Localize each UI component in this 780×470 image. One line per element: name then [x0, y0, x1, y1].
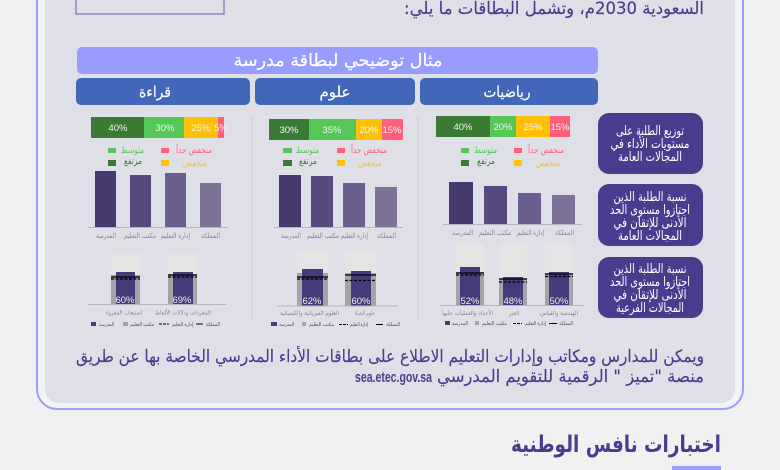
math chart legend: المدرسة	[452, 321, 468, 327]
reading legend: مرتفع	[124, 157, 142, 167]
reading sub-domain chart	[88, 253, 226, 316]
row label: sub domains: المجالات الفرعية	[616, 301, 684, 316]
title bar: مثال توضيحي لبطاقة مدرسة	[234, 51, 442, 71]
math stacked bar: 25%	[523, 122, 543, 133]
science legend	[283, 143, 387, 169]
reading stacked bar: 5%	[214, 123, 228, 134]
math sub-domain chart: 48%	[503, 296, 523, 307]
reading legend: متوسط	[121, 146, 144, 156]
science sub-domain chart: 60%	[351, 296, 371, 307]
math chart legend	[445, 321, 573, 327]
header: reading	[76, 78, 250, 105]
science sub-domain chart	[277, 251, 398, 317]
math sub-domain chart: الهندسة والقياس	[540, 310, 578, 317]
reading bar chart: المدرسة	[96, 232, 116, 240]
reading bar chart: إدارة التعليم	[161, 232, 190, 240]
reading sub-domain chart: المفردات ودلالات الألفاظ	[155, 308, 211, 316]
reading sub-domain chart: 60%	[115, 295, 135, 306]
math stacked bar	[436, 116, 570, 137]
reading chart legend	[91, 322, 220, 328]
math bar chart: المدرسة	[452, 229, 473, 237]
reading chart legend: مكتب التعليم	[130, 322, 154, 328]
science sub-domain chart: 62%	[302, 296, 322, 307]
science legend: منخفض جداً	[350, 143, 387, 156]
empty outlined box at top	[76, 0, 224, 14]
header: math: رياضيات	[484, 83, 530, 101]
math bar chart: المملكة	[555, 229, 574, 237]
row label: general domains	[598, 184, 703, 246]
reading bar chart: المملكة	[201, 232, 220, 240]
row label: sub domains: اجتازوا مستوى الحد	[610, 275, 690, 290]
header: science	[255, 78, 415, 105]
reading column	[88, 117, 228, 328]
row label: sub domains: نسبة الطلبة الذين	[614, 262, 686, 277]
science chart legend	[271, 322, 400, 328]
science bar chart	[274, 175, 403, 240]
bottom text: منصة "تميز " الرقمية للتقويم المدرسي	[437, 367, 704, 387]
row label: sub domains	[598, 257, 703, 318]
science chart legend: المملكة	[386, 322, 400, 328]
science sub-domain chart: العلوم الفيزيائية والكيميائية	[280, 310, 339, 317]
row label: sub domains: الأدنى للإتقان في	[614, 286, 686, 303]
bottom text	[76, 346, 704, 387]
title bar	[77, 47, 598, 74]
science legend: منخفض	[358, 159, 382, 169]
science sub-domain chart: علوم الحياة	[355, 310, 375, 317]
reading stacked bar	[91, 117, 228, 138]
science chart legend: المدرسة	[279, 322, 294, 328]
reading legend	[108, 143, 212, 169]
reading stacked bar: 30%	[155, 123, 175, 134]
math sub-domain chart: الجبر	[508, 310, 519, 317]
math sub-domain chart: الأعداد والعمليات عليها	[442, 309, 493, 317]
row label: general domains: اجتازوا مستوى الحد	[610, 203, 690, 218]
reading sub-domain chart: استيعاب المقروء	[106, 310, 142, 316]
math chart legend: المملكة	[559, 321, 573, 327]
science chart legend: إدارة التعليم	[350, 322, 368, 328]
row label: distribution: توزيع الطلبة على	[616, 124, 684, 139]
section heading: اختبارات نافس الوطنية	[511, 432, 721, 458]
math sub-domain chart	[440, 244, 584, 317]
reading chart legend: إدارة التعليم	[172, 322, 194, 328]
reading bar chart	[88, 171, 228, 240]
science legend: متوسط	[296, 146, 319, 156]
science bar chart: مكتب التعليم	[307, 232, 339, 240]
math stacked bar: 15%	[550, 122, 570, 133]
row label: distribution	[598, 113, 703, 174]
math legend: منخفض	[536, 159, 560, 169]
row label: general domains: نسبة الطلبة الذين	[614, 190, 686, 205]
math bar chart: إدارة التعليم	[517, 229, 544, 237]
math bar chart: مكتب التعليم	[479, 229, 511, 237]
reading legend: منخفض	[183, 159, 207, 169]
header: science: علوم	[320, 83, 350, 101]
math sub-domain chart: 50%	[549, 296, 569, 307]
math legend	[461, 143, 564, 169]
science stacked bar	[269, 119, 403, 140]
math legend: مرتفع	[477, 157, 495, 167]
math sub-domain chart: 52%	[460, 296, 480, 307]
math chart legend: إدارة التعليم	[525, 321, 547, 327]
reading stacked bar: 40%	[108, 123, 128, 134]
math legend: منخفض جداً	[527, 143, 564, 156]
row label: general domains: المجالات العامة	[618, 229, 682, 244]
science stacked bar: 30%	[279, 125, 299, 136]
math column	[436, 116, 584, 327]
science stacked bar: 35%	[322, 125, 342, 136]
reading sub-domain chart: 69%	[172, 295, 192, 306]
reading chart legend: المدرسة	[99, 322, 114, 328]
outer panel	[37, 0, 743, 409]
row label: distribution: المجالات العامة	[618, 150, 682, 165]
science column	[269, 119, 403, 328]
science chart legend: مكتب التعليم	[309, 322, 334, 328]
science bar chart: المملكة	[377, 232, 396, 240]
science bar chart: المدرسة	[281, 232, 301, 240]
math stacked bar: 40%	[453, 122, 473, 133]
row label: general domains: الأدنى للإتقان في	[614, 214, 686, 231]
science bar chart: إدارة التعليم	[341, 232, 368, 240]
math bar chart	[443, 182, 582, 237]
reading bar chart: مكتب التعليم	[124, 232, 156, 240]
bottom text: sea.etec.gov.sa	[355, 369, 432, 386]
science stacked bar: 20%	[359, 125, 379, 136]
reading chart legend: المملكة	[206, 322, 220, 328]
header: reading: قراءة	[139, 83, 171, 101]
reading legend: منخفض جداً	[175, 143, 212, 156]
math stacked bar: 20%	[493, 122, 513, 133]
header: math	[420, 78, 598, 105]
math chart legend: مكتب التعليم	[482, 321, 507, 327]
math legend: متوسط	[474, 146, 497, 156]
science stacked bar: 15%	[382, 125, 402, 136]
science legend: مرتفع	[299, 157, 317, 167]
reading stacked bar: 25%	[191, 123, 211, 134]
bottom text: ويمكن للمدارس ومكاتب وإدارات التعليم الاطلاع على بطاقات الأداء المدرسي الخاصة بها عن طريق	[76, 346, 704, 367]
row label: distribution: مستويات الأداء في	[610, 135, 690, 152]
